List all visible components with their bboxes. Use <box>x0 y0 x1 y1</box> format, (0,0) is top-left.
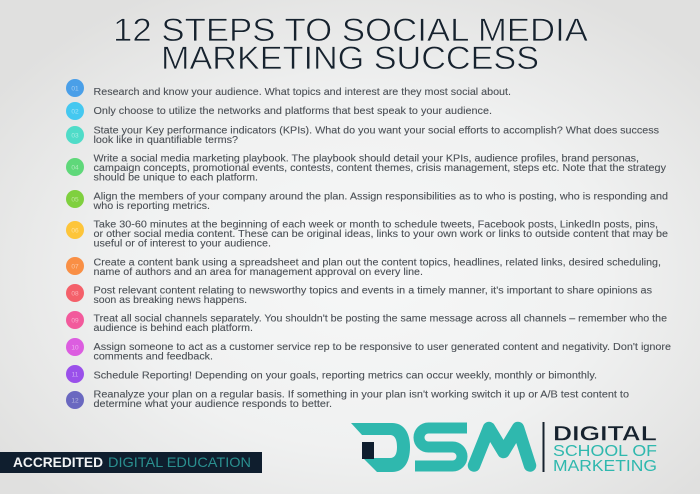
banner: accredited digital education <box>0 452 262 473</box>
step 5: who is reporting metrics. <box>92 201 210 212</box>
step 3: State your Key performance indicators (KPIs). What do you want your social efforts to accomplish? What does success <box>94 126 659 136</box>
title: MARKETING SUCCESS <box>161 40 539 76</box>
step 8 <box>66 284 652 306</box>
step 3: 03 <box>71 132 79 140</box>
banner: accredited digital education: ACCREDITED <box>13 454 103 470</box>
logo wordmark: MARKETING <box>553 458 657 475</box>
title <box>113 12 589 76</box>
step 2: 02 <box>71 108 79 116</box>
step 4: 04 <box>71 164 79 172</box>
step 9 <box>66 311 667 334</box>
step 5: Align the members of your company around the plan. Assign responsibilities as to who is posting, who is responding and <box>94 192 668 202</box>
step 4: should be unique to each platform. <box>94 172 258 184</box>
step 10: 10 <box>71 344 79 352</box>
step 4: campaign concepts, promotional events, contests, content themes, crisis management, steps etc. Note that the strategy <box>94 163 667 174</box>
step 6: useful or of interest to your audience. <box>94 238 271 250</box>
step 10: Assign someone to act as a customer service rep to be responsive to user generated content and negativity. Don't ignore <box>94 342 671 353</box>
step 2: Only choose to utilize the networks and platforms that best speak to your audience. <box>94 106 492 117</box>
step 1: Research and know your audience. What topics and interest are they most social about. <box>94 87 511 98</box>
step 3 <box>66 126 659 146</box>
logo: Digital School of Marketing <box>351 422 657 475</box>
step 5 <box>66 190 668 212</box>
step 11 <box>66 365 597 383</box>
step 10 <box>66 338 671 362</box>
step 12: determine what your audience responds to better. <box>94 399 332 410</box>
step 9: 09 <box>71 318 79 324</box>
step 11: 11 <box>72 372 79 378</box>
step 7: name of authors and an area for management approval on every line. <box>94 267 423 278</box>
icon: DSM monogram <box>351 423 530 472</box>
step 11: Schedule Reporting! Depending on your goals, reporting metrics can occur weekly, monthly or bimonthly. <box>94 370 597 382</box>
step 12: 12 <box>71 398 79 404</box>
list of steps <box>66 79 671 410</box>
step 9: Treat all social channels separately. You shouldn't be posting the same message across all channels – remember who the <box>94 314 667 324</box>
step 4 <box>66 154 667 184</box>
logo wordmark: DIGITAL <box>553 422 657 446</box>
step 3: look like in quantifiable terms? <box>94 135 238 146</box>
step 6: or other social media content. These can be original ideas, links to your own work or links to outside content that may be <box>94 229 668 240</box>
step 10: comments and feedback. <box>94 352 213 362</box>
step 8: 08 <box>71 290 79 298</box>
step 7: Create a content bank using a spreadsheet and plan out the content topics, headlines, related links, desired scheduling, <box>94 258 661 268</box>
step 12 <box>66 390 629 410</box>
step 1 <box>66 79 511 98</box>
banner: accredited digital education: DIGITAL EDUCATION <box>108 454 251 470</box>
step 2 <box>66 102 492 120</box>
logo wordmark: SCHOOL OF <box>553 443 657 460</box>
step 12: Reanalyze your plan on a regular basis. If something in your plan isn't working switch it up or A/B test content to <box>94 390 629 400</box>
step 6 <box>66 220 668 250</box>
step 5: 05 <box>71 196 79 204</box>
step 8: soon as breaking news happens. <box>94 295 247 306</box>
step 8: Post relevant content relating to newsworthy topics and events in a timely manner, it's important to share opinions as <box>94 286 652 296</box>
step 6: Take 30-60 minutes at the beginning of each week or month to schedule tweets, Facebook posts, LinkedIn posts, pins, <box>94 220 658 230</box>
step 6: 06 <box>71 228 79 234</box>
logo wordmark <box>553 422 657 475</box>
divider <box>542 422 544 472</box>
step 7: 07 <box>71 264 79 270</box>
step 4: Write a social media marketing playbook. The playbook should detail your KPIs, audience profiles, brand personas, <box>94 154 639 164</box>
title: 12 STEPS TO SOCIAL MEDIA <box>113 12 589 48</box>
step 7 <box>66 257 661 278</box>
step 9: audience is behind each platform. <box>94 323 253 334</box>
step 1: 01 <box>71 86 79 92</box>
